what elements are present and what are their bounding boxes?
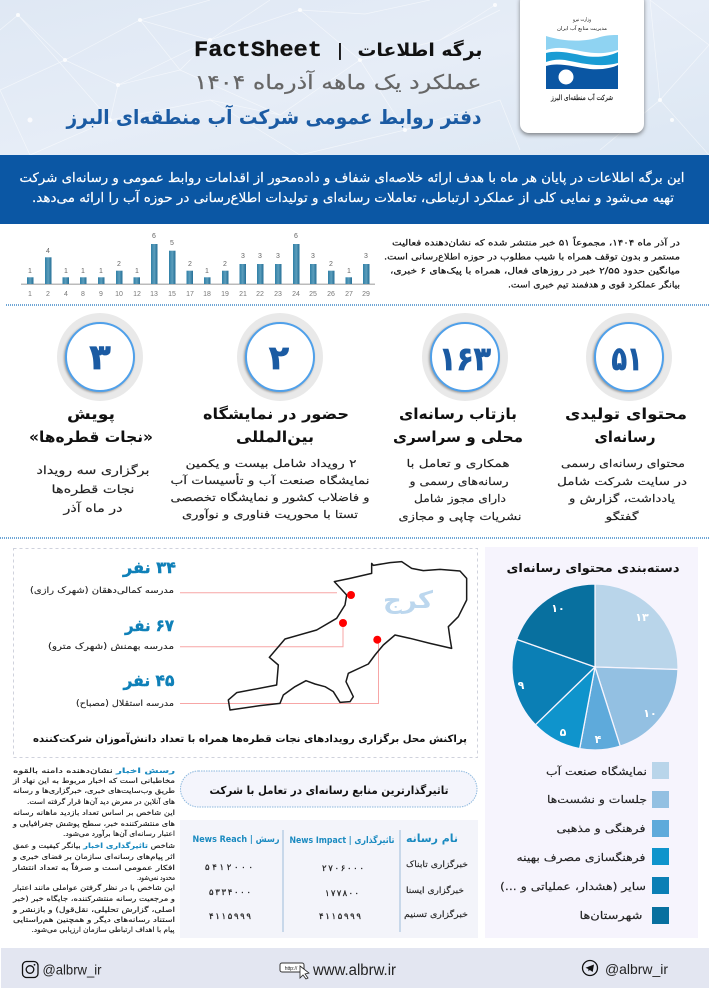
bar chart: 19 (221, 291, 229, 298)
legend: جلسات و نشست‌ها (547, 794, 647, 806)
stat text: ۲ رویداد شامل بیست و یکمین (186, 458, 357, 470)
text block: definitions: این شاخص با در نظر گرفتن عواملی مانند اعتبار (12, 883, 175, 892)
text block: definitions: های منتشرکننده خبر، سطح پوشش جغرافیایی و (12, 820, 175, 828)
bar chart: 8 (81, 291, 85, 298)
location 2: ۶۷ نفر (124, 616, 174, 635)
table reach values: ۵۴۱۲۰۰۰ (205, 863, 253, 873)
stat heading (393, 405, 523, 446)
pie values: ۱۰ (551, 602, 565, 615)
logo ministry text: مدیریت منابع آب ایران (557, 25, 607, 32)
location 3: ۴۵ نفر (123, 671, 175, 690)
text block: definitions: شاخص تاثیرگذاری اخبار بیانگر کیفیت و عمق (13, 841, 175, 850)
stat text: گفتگو (604, 510, 638, 523)
stat text: برگزاری سه رویداد (36, 463, 150, 478)
table header (193, 832, 458, 846)
bar chart: 25 (309, 291, 317, 298)
location 1 (30, 558, 176, 596)
bar chart: 4 (64, 291, 68, 298)
chart description: میانگین حدود ۲/۵۵ خبر در روزهای فعال، همراه با پیک‌های ۶ خبری، (390, 266, 680, 276)
location dots (339, 591, 381, 644)
bar chart: 15 (168, 291, 176, 298)
intro band: تهیه می‌شود و نمایی کلی از عملکرد ارتباطی، تعاملات رسانه‌ای و تولیدات اطلاع‌رسانی در حوزه آب را ارائه می‌دهد. (32, 189, 674, 206)
bar chart: 21 (239, 291, 247, 298)
stat heading: «نجات قطره‌ها» (29, 428, 153, 446)
text block: definitions: طریق وب‌سایت‌های خبری، خبرگزاری‌ها و رسانه (13, 786, 175, 795)
stat heading: رسانه‌ای (594, 428, 656, 446)
stat heading (565, 405, 687, 446)
chart description: در آذر ماه ۱۴۰۴، مجموعاً ۵۱ خبر منتشر شده که نشان‌دهنده فعالیت (392, 236, 680, 248)
bar chart: 2 (223, 261, 227, 268)
text block: definitions: اثر پیام‌های رسانه‌ای سازمان بر فضای خبری و (12, 853, 175, 861)
stat heading: محلی و سراسری (393, 428, 523, 446)
bar chart: 24 (292, 291, 300, 298)
stat text: رسانه‌های رسمی و (408, 476, 508, 488)
website (280, 962, 396, 979)
text block: definitions: استناد رسانه‌های دیگر و همچنین هم‌راستایی (13, 915, 175, 924)
bar chart: 2 (117, 261, 121, 268)
legend: فرهنگی و مذهبی (556, 822, 646, 835)
pill heading (180, 771, 477, 807)
stat: media coverage (393, 313, 523, 523)
pie values: ۹ (518, 679, 525, 692)
bar chart: 29 (362, 291, 370, 298)
bar chart: 1 (205, 268, 209, 275)
legend: نمایشگاه صنعت آب (546, 765, 647, 778)
stat text: نشریات چاپی و مجازی (398, 511, 522, 523)
bar chart: 2 (329, 261, 333, 268)
location 1: ۳۴ نفر (122, 558, 176, 577)
legend: سایر (هشدار، عملیاتی و ...) (500, 881, 646, 893)
telegram: @albrw_ir (605, 961, 668, 977)
text block: definitions (12, 767, 175, 934)
logo ministry text (557, 17, 607, 32)
stat circle 51 (586, 313, 672, 401)
bar chart: 6 (294, 233, 298, 240)
footer (1, 948, 709, 988)
bar chart: 1 (81, 268, 85, 275)
intro band: این برگه اطلاعات در پایان هر ماه با هدف ارائه خلاصه‌ای شفاف و داده‌محور از اقدامات روابط عمومی و رسانه‌ای شرکت (20, 170, 684, 186)
bar chart (21, 233, 375, 298)
text block: definitions: اصلی، گزارش تحلیلی، نقل‌قول) و بازنشر و (12, 905, 175, 914)
stat circle 2 (237, 313, 323, 401)
table names: خبرگزاری تسنیم (404, 909, 468, 920)
stat text: تستا با محوریت فناوری و نوآوری (182, 508, 358, 521)
panel: map (14, 548, 478, 758)
panel: content categories (485, 547, 698, 938)
bar chart: 3 (258, 253, 262, 260)
bar chart: 5 (170, 240, 174, 247)
logo company name: شرکت آب منطقه‌ای البرز (550, 93, 613, 102)
pie values: ۵ (560, 726, 567, 739)
website: www.albrw.ir (312, 962, 396, 979)
stat text (557, 458, 687, 523)
title (194, 38, 482, 63)
instagram: @albrw_ir (42, 962, 102, 978)
stat text: همکاری و تعامل با (406, 458, 510, 470)
pill heading: تاثیرگذارترین منابع رسانه‌ای در تعامل با شرکت (210, 784, 448, 797)
stat: campaign (29, 313, 153, 516)
table impact values (319, 864, 364, 922)
bar chart: 1 (347, 268, 351, 275)
stat text: دارای مجوز شامل (414, 493, 506, 505)
stat circle 163 (422, 313, 508, 401)
stat: produced content (557, 313, 687, 523)
text block: definitions: رسش اخبار نشان‌دهنده دامنه بالقوه (13, 767, 175, 775)
bar chart: 1 (28, 268, 32, 275)
bar chart: 1 (99, 268, 103, 275)
stat heading: محتوای تولیدی (565, 405, 687, 423)
bar chart: 23 (274, 291, 282, 298)
text block: definitions: محدود نمی‌شود. (137, 874, 175, 882)
location 2: مدرسه بهمنش (شهرک مترو) (48, 642, 174, 652)
location 3 (76, 671, 175, 709)
table impact values: ۴۱۱۵۹۹۹ (319, 912, 361, 922)
stat: exhibition (170, 313, 370, 521)
bar chart: 1 (135, 268, 139, 275)
map of Karaj (228, 562, 467, 710)
title: برگه اطلاعات (358, 39, 482, 61)
stat heading: حضور در نمایشگاه (203, 405, 349, 423)
pie chart (512, 584, 678, 750)
legend: فرهنگسازی مصرف بهینه (516, 851, 646, 864)
stat text (170, 458, 370, 521)
bar chart: 4 (46, 248, 50, 255)
text block: definitions: های آنلاین در معرض دید آن‌ها قرار گرفته است. (27, 797, 175, 806)
bar chart: 10 (115, 291, 123, 298)
table reach values (205, 863, 253, 922)
stat text: نمایشگاه صنعت آب و تأسیسات آب (170, 473, 370, 487)
title: FactSheet (194, 38, 322, 63)
map label: کرج (383, 586, 433, 614)
table names (404, 859, 468, 920)
table header: تاثیرگذاری | News Impact (290, 834, 394, 846)
table reach values: ۴۱۱۵۹۹۹ (209, 912, 251, 922)
chart description (384, 236, 680, 290)
bar chart: 9 (99, 291, 103, 298)
stat heading: بازتاب رسانه‌ای (399, 405, 517, 423)
title: | (337, 41, 343, 61)
table impact values: ۱۷۷۸۰۰ (325, 889, 359, 899)
stat heading: پویش (67, 405, 115, 424)
table names: خبرگزاری تابناک (406, 859, 468, 870)
bar chart: 3 (364, 253, 368, 260)
table names: خبرگزاری ایسنا (406, 885, 464, 896)
location 1: مدرسه کمالی‌دهقان (شهرک رازی) (30, 586, 174, 596)
stat text: در سایت شرکت شامل (557, 476, 687, 488)
legend: شهرستان‌ها (580, 910, 642, 922)
bar chart: 1 (28, 291, 32, 298)
pie title: دسته‌بندی محتوای رسانه‌ای (506, 561, 680, 576)
bar chart: 3 (241, 253, 245, 260)
header background (0, 0, 709, 156)
stat circle 51: ۵۱ (612, 339, 642, 378)
stat circle 2: ۲ (269, 338, 289, 377)
logo ministry text: وزارت نیرو (572, 17, 591, 23)
bar chart: 3 (276, 253, 280, 260)
pie values: ۱۳ (635, 611, 649, 624)
bar chart: 17 (186, 291, 194, 298)
location 2 (48, 616, 174, 652)
bar chart: 27 (345, 291, 353, 298)
stat text: نجات قطره‌ها (52, 482, 134, 497)
text block: definitions: افکار عمومی است و صرفاً به تعداد انتشار (12, 862, 175, 872)
bar chart: 22 (256, 291, 264, 298)
pie values: ۱۰ (643, 707, 657, 720)
bar chart: 2 (188, 261, 192, 268)
map caption: پراکنش محل برگزاری رویدادهای نجات قطره‌ها همراه با تعداد دانش‌آموزان شرکت‌کننده (33, 732, 467, 745)
stat circle 163: ۱۶۳ (439, 339, 491, 378)
table header: نام رسانه (406, 832, 458, 845)
bar chart: 3 (311, 253, 315, 260)
bar chart: 18 (203, 291, 211, 298)
table impact values: ۲۷۰۶۰۰۰ (322, 864, 364, 874)
location 3: مدرسه استقلال (مصباح) (76, 699, 174, 709)
stat circle 3: ۳ (89, 338, 111, 378)
bar chart: 2 (46, 291, 50, 298)
text block: definitions: مخاطبانی است که اخبار مربوط به این نهاد از (12, 777, 175, 785)
text block: definitions: اعتبار رسانه‌ای آن‌ها برآورد می‌شود. (63, 829, 175, 838)
bar chart: 6 (152, 233, 156, 240)
stat heading: بین‌المللی (236, 428, 314, 446)
pie values (518, 602, 657, 746)
pie values: ۴ (595, 733, 602, 746)
bar chart: 26 (327, 291, 335, 298)
text block: definitions: این شاخص بر اساس تعداد بازدید ماهانه رسانه (13, 809, 175, 817)
bar chart: 12 (133, 291, 141, 298)
stat heading (203, 405, 349, 446)
text block: definitions: و مرجعیت رسانه منتشرکننده، جایگاه خبر (خبر (12, 894, 175, 903)
stat text: و فاضلاب کشور و نمایشگاه تخصصی (170, 491, 370, 504)
chart description: مستمر و بدون توقف همراه با شیب مطلوب در حوزه اطلاع‌رسانی است. (384, 252, 680, 262)
website: http:// (285, 966, 298, 972)
subtitle: عملکرد یک ماهه آذرماه ۱۴۰۴ (195, 69, 482, 94)
table header: رسش | News Reach (193, 835, 280, 845)
stat text: در ماه آذر (62, 501, 122, 516)
logo card (520, 0, 644, 133)
intro band (0, 155, 709, 224)
chart description: بیانگر عملکرد قوی و هدفمند تیم خبری است. (508, 280, 680, 290)
legend (500, 762, 669, 924)
text block: definitions: پیام با اهداف ارتباطی سازمان ارزیابی می‌شود. (32, 926, 175, 934)
table reach values: ۵۳۳۴۰۰۰ (209, 888, 251, 898)
office name: دفتر روابط عمومی شرکت آب منطقه‌ای البرز (66, 104, 482, 129)
stat heading (29, 405, 153, 446)
stat text (36, 463, 150, 516)
stat text (398, 458, 522, 523)
stat text: محتوای رسانه‌ای رسمی (561, 458, 685, 470)
bar chart: 1 (64, 268, 68, 275)
bar chart: 13 (150, 291, 158, 298)
table: media sources (180, 820, 478, 938)
stat text: یادداشت، گزارش و (568, 492, 675, 505)
stat circle 3 (57, 313, 143, 401)
connector lines (180, 593, 378, 704)
logo waves (546, 35, 618, 89)
